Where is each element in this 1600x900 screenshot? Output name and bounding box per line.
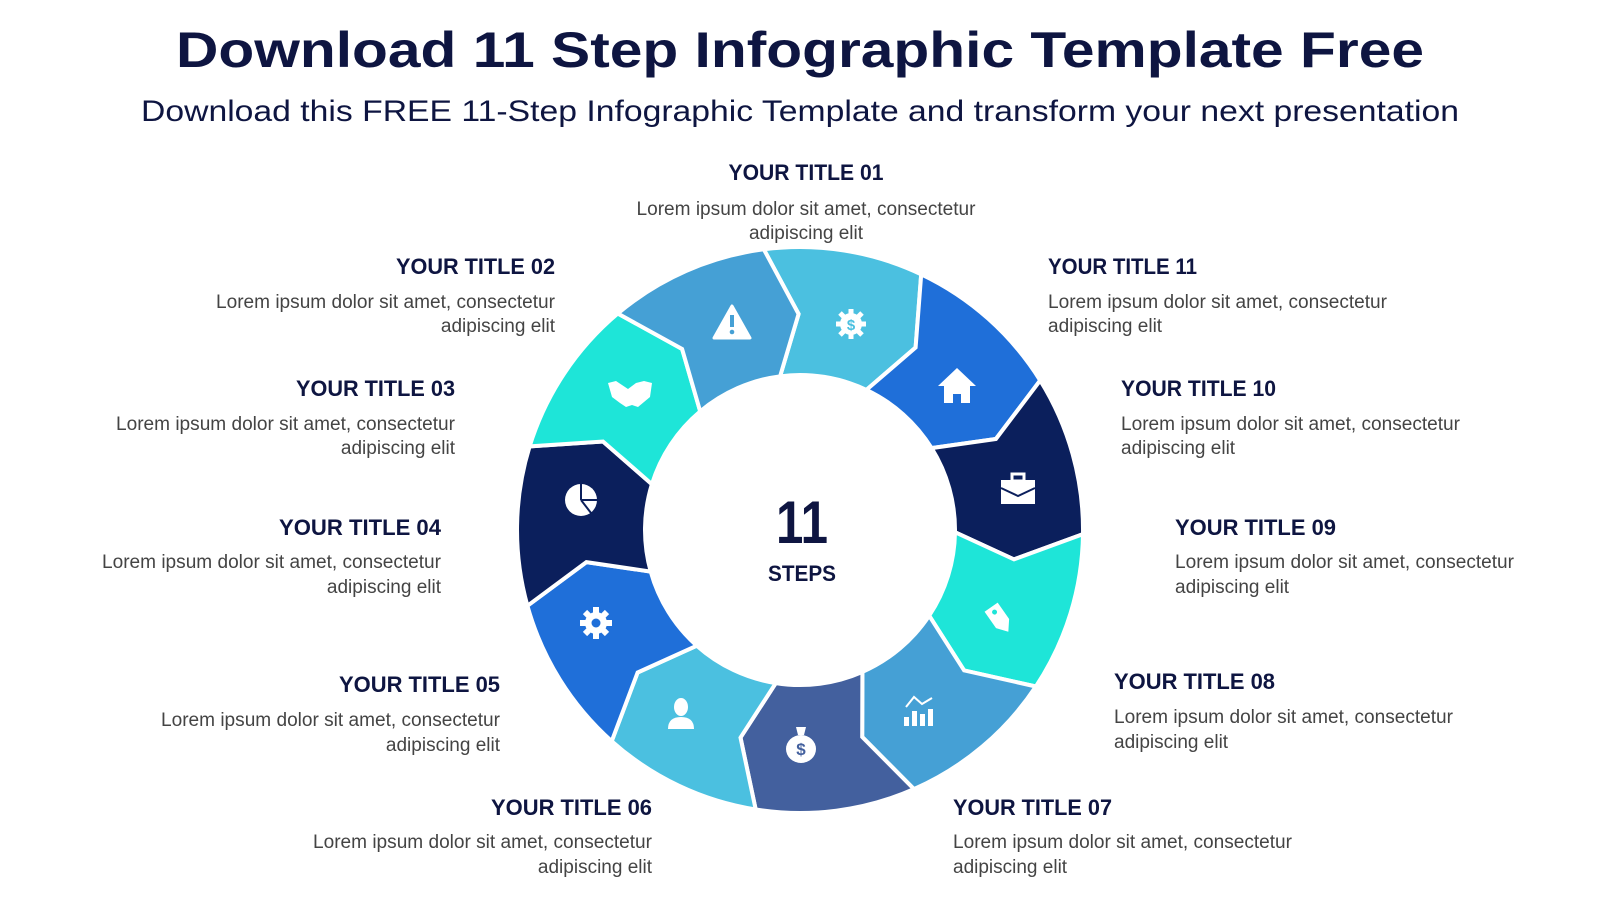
segment 01 (764, 247, 921, 390)
label 04: Lorem ipsum dolor sit amet, consectetur (102, 552, 442, 573)
label 02: adipiscing elit (441, 316, 556, 337)
ring of 11 segments (517, 247, 1083, 813)
label 04: YOUR TITLE 04 (279, 515, 442, 540)
center label: STEPS (768, 561, 836, 586)
label 01: Lorem ipsum dolor sit amet, consectetur (636, 199, 976, 220)
label 08: YOUR TITLE 08 (1114, 669, 1275, 694)
label 02: Lorem ipsum dolor sit amet, consectetur (216, 292, 556, 313)
label 11: adipiscing elit (1048, 316, 1163, 337)
icon: gear (05) (580, 607, 612, 639)
label 03 (116, 376, 456, 459)
segment 02 (618, 249, 799, 411)
label 01 (636, 160, 976, 244)
label 11 (1048, 254, 1388, 337)
icon: handshake (03) (608, 381, 652, 407)
label 08: Lorem ipsum dolor sit amet, consectetur (1114, 707, 1454, 728)
segment 08 (862, 616, 1036, 789)
label 02: YOUR TITLE 02 (396, 254, 555, 279)
segment 04 (517, 442, 652, 606)
label 10: YOUR TITLE 10 (1121, 376, 1276, 401)
label 11: YOUR TITLE 11 (1048, 254, 1197, 279)
label 05: Lorem ipsum dolor sit amet, consectetur (161, 710, 501, 731)
label 03: adipiscing elit (341, 438, 456, 459)
icon: dollar gear (01): $ (847, 317, 856, 334)
subtitle: Download this FREE 11-Step Infographic Template and transform your next presentation (141, 95, 1459, 128)
label 06: adipiscing elit (538, 857, 653, 878)
label 04: adipiscing elit (327, 577, 442, 598)
label 08: adipiscing elit (1114, 732, 1229, 753)
label 09: Lorem ipsum dolor sit amet, consectetur (1175, 552, 1515, 573)
icon: money bag (07): $ (796, 740, 806, 759)
label 07: Lorem ipsum dolor sit amet, consectetur (953, 832, 1293, 853)
label 10: adipiscing elit (1121, 438, 1236, 459)
label 09: YOUR TITLE 09 (1175, 515, 1336, 540)
label 01: YOUR TITLE 01 (728, 160, 884, 185)
center label: 11 (776, 489, 828, 556)
segment 06 (612, 646, 776, 810)
segment 10 (932, 380, 1083, 559)
segment 05 (527, 562, 697, 741)
label 05 (161, 672, 501, 756)
icon: person (06) (668, 698, 694, 729)
label 06: YOUR TITLE 06 (491, 795, 652, 820)
icon: warning (02) (714, 306, 750, 338)
title: Download 11 Step Infographic Template Free (176, 22, 1424, 78)
label 03: YOUR TITLE 03 (296, 376, 455, 401)
icon: dollar gear (01) (836, 309, 866, 339)
label 06 (313, 795, 653, 878)
label 10: Lorem ipsum dolor sit amet, consectetur (1121, 414, 1461, 435)
icon: house (11) (938, 368, 976, 403)
segment 11 (866, 274, 1040, 448)
label 07 (953, 795, 1293, 878)
icon: tag (09) (985, 603, 1015, 636)
label 11: Lorem ipsum dolor sit amet, consectetur (1048, 292, 1388, 313)
label 03: Lorem ipsum dolor sit amet, consectetur (116, 414, 456, 435)
label 10 (1121, 376, 1461, 459)
label 02 (216, 254, 556, 337)
label 09: adipiscing elit (1175, 577, 1290, 598)
segment 09 (929, 532, 1083, 686)
icon: money bag (07) (786, 727, 816, 763)
center label (768, 489, 836, 586)
segment 03 (530, 314, 700, 484)
label 07: adipiscing elit (953, 857, 1068, 878)
label 05: YOUR TITLE 05 (339, 672, 500, 697)
label 07: YOUR TITLE 07 (953, 795, 1112, 820)
label 08 (1114, 669, 1454, 753)
segment 07 (740, 672, 914, 813)
label 04 (102, 515, 442, 598)
icon: briefcase (10) (1001, 474, 1035, 504)
label 06: Lorem ipsum dolor sit amet, consectetur (313, 832, 653, 853)
label 01: adipiscing elit (749, 223, 864, 244)
icon: bar chart (08) (904, 697, 933, 726)
label 05: adipiscing elit (386, 735, 501, 756)
icon: pie chart (04) (565, 484, 597, 516)
label 09 (1175, 515, 1515, 598)
